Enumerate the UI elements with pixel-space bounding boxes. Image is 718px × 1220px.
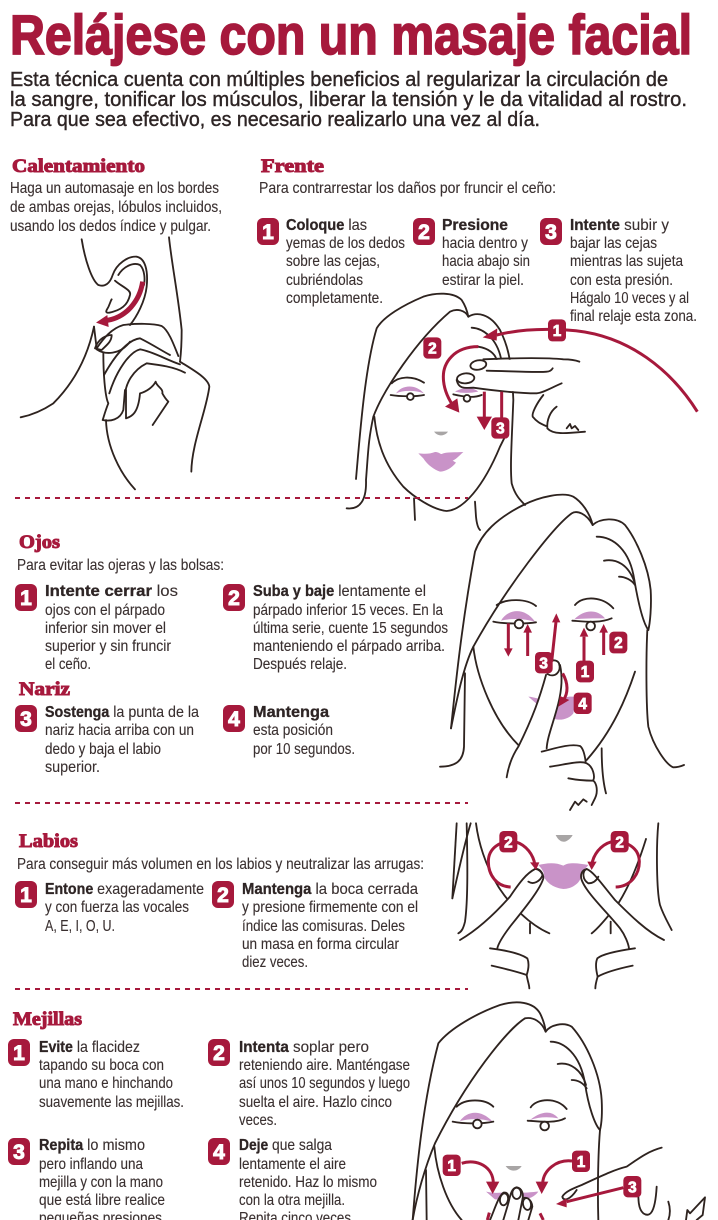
step 3 frente: 3 xyxy=(545,221,557,244)
number badges xyxy=(443,1151,641,1197)
lips xyxy=(418,452,463,472)
step 1 frente: completamente. xyxy=(286,290,383,307)
nose xyxy=(506,1166,522,1171)
arrow 2: 2 xyxy=(428,341,437,358)
step 1 frente: Coloque las xyxy=(286,217,367,234)
step 2 mejillas: veces. xyxy=(239,1112,277,1129)
circular arrows xyxy=(488,841,639,887)
step 1 frente: cubriéndolas xyxy=(286,272,363,289)
panel: ojos y nariz xyxy=(15,495,684,810)
right hand xyxy=(581,869,664,988)
arrow 1 xyxy=(483,319,697,412)
illustration: lips and fingers xyxy=(452,823,672,988)
step 1 labios: Entone exageradamente xyxy=(45,881,204,898)
step 3 nariz: superior. xyxy=(45,759,100,776)
step 2 mejillas: 2 xyxy=(213,1042,225,1065)
right hand pressing cheek xyxy=(562,1148,705,1220)
intro paragraph: Para que sea efectivo, es necesario realizarlo una vez al día. xyxy=(10,108,540,131)
hand xyxy=(542,745,597,810)
eye shadow xyxy=(501,611,605,622)
step 4 nariz xyxy=(223,704,355,758)
arrow 3 xyxy=(477,392,509,439)
text: calentamiento: usando los dedos índice y pulgar. xyxy=(10,218,211,235)
step 1 frente: 1 xyxy=(262,221,274,244)
step 2 frente: 2 xyxy=(418,221,430,244)
eye shadow xyxy=(396,386,478,393)
step 3 frente xyxy=(540,217,697,325)
step 3 frente: mientras las sujeta xyxy=(570,253,683,270)
step 2 mejillas xyxy=(208,1039,410,1129)
step 3 mejillas: mejilla y con la mano xyxy=(39,1174,163,1191)
step 1 mejillas: una mano e hinchando xyxy=(39,1075,173,1092)
number badges: 2 xyxy=(504,834,513,851)
panel: labios xyxy=(15,823,672,988)
step 3 nariz xyxy=(15,704,199,776)
step 1 ojos: 1 xyxy=(20,587,32,610)
number badges: 4 xyxy=(578,696,587,713)
left hand xyxy=(460,869,543,988)
step 1 ojos: el ceño. xyxy=(45,656,91,673)
step 2 labios: índice las comisuras. Deles xyxy=(242,918,405,935)
step 1 mejillas: 1 xyxy=(13,1042,25,1065)
step 3 frente: con esta presión. xyxy=(570,272,673,289)
number badges: 1 xyxy=(447,1158,456,1175)
step 1 frente xyxy=(257,217,405,307)
step 1 labios: y con fuerza las vocales xyxy=(45,899,189,916)
step 2 mejillas: reteniendo aire. Manténgase xyxy=(239,1057,410,1074)
step 2 ojos: manteniendo el párpado arriba. xyxy=(253,638,445,655)
step 4 nariz: por 10 segundos. xyxy=(253,741,355,758)
number badges: 1 xyxy=(581,664,590,681)
text: ojos intro: Para evitar las ojeras y las bolsas: xyxy=(17,557,224,574)
panel: frente xyxy=(257,157,697,530)
lips xyxy=(486,1192,538,1199)
number badges xyxy=(535,632,627,714)
number badges: 3 xyxy=(539,655,548,672)
heading: calentamiento: Calentamiento xyxy=(12,157,145,177)
nose xyxy=(556,835,573,842)
heading: ojos: Ojos xyxy=(19,533,60,553)
step 3 frente: final relaje esta zona. xyxy=(570,308,697,325)
step 1 mejillas xyxy=(8,1039,184,1111)
step 2 ojos: Suba y baje lentamente el xyxy=(253,583,426,600)
step 4 mejillas: con la otra mejilla. xyxy=(239,1192,345,1209)
step 1 frente: yemas de los dedos xyxy=(286,235,405,252)
step 3 frente: bajar las cejas xyxy=(570,235,657,252)
arrow 2 xyxy=(423,337,478,413)
step 3 nariz: Sostenga la punta de la xyxy=(45,704,199,721)
step 3 nariz: nariz hacia arriba con un xyxy=(45,722,194,739)
step 3 mejillas: pero inflando una xyxy=(39,1156,143,1173)
step 1 labios xyxy=(15,881,204,935)
text: calentamiento: de ambas orejas, lóbulos incluidos, xyxy=(10,199,222,216)
step 1 ojos: Intente cerrar los xyxy=(45,583,178,600)
step 1 ojos: inferior sin mover el xyxy=(45,620,166,637)
panel: mejillas xyxy=(8,1002,705,1220)
arrows xyxy=(504,613,608,707)
step 4 mejillas: lentamente el aire xyxy=(239,1156,346,1173)
hand over mouth xyxy=(490,1187,532,1220)
step 3 mejillas: Repita lo mismo xyxy=(39,1137,145,1154)
number badges: 3 xyxy=(628,1179,637,1196)
illustration: face with cheek exercise xyxy=(413,1002,705,1220)
arrow 3: 3 xyxy=(496,421,505,438)
step 3 nariz: 3 xyxy=(20,708,32,731)
step 2 ojos: párpado inferior 15 veces. En la xyxy=(253,602,443,619)
step 3 mejillas: que está libre realice xyxy=(39,1192,165,1209)
step 2 mejillas: Intenta soplar pero xyxy=(239,1039,369,1056)
step 2 labios: un masa en forma circular xyxy=(242,936,400,953)
step 2 ojos: 2 xyxy=(228,587,240,610)
step 3 nariz: dedo y baja el labio xyxy=(45,741,161,758)
step 4 nariz: 4 xyxy=(228,708,240,731)
number badges xyxy=(499,831,629,852)
step 1 labios: 1 xyxy=(20,884,32,907)
heading: frente: Frente xyxy=(261,157,324,177)
step 4 nariz: Mantenga xyxy=(253,704,329,721)
heading: mejillas: Mejillas xyxy=(13,1010,82,1030)
intro paragraph: Esta técnica cuenta con múltiples beneficios al regularizar la circulación de xyxy=(10,68,668,91)
step 2 labios: 2 xyxy=(217,884,229,907)
number badges: 2 xyxy=(614,635,623,652)
heading: nariz: Nariz xyxy=(19,680,70,700)
step 1 ojos: superior y sin fruncir xyxy=(45,638,172,655)
step 2 ojos: última serie, cuente 15 segundos xyxy=(253,620,448,637)
illustration: face with forehead massage xyxy=(347,294,697,530)
arrow 1: 1 xyxy=(553,323,562,340)
step 2 ojos: Después relaje. xyxy=(253,656,347,673)
step 4 mejillas: Deje que salga xyxy=(239,1137,332,1154)
step 1 frente: sobre las cejas, xyxy=(286,253,380,270)
number badges: 1 xyxy=(577,1154,586,1171)
illustration: face with eye and nose exercise xyxy=(440,495,684,810)
step 2 ojos xyxy=(223,583,448,673)
step 2 frente: estirar la piel. xyxy=(442,272,524,289)
illustration: ear and hand xyxy=(21,237,209,489)
step 2 labios: y presione firmemente con el xyxy=(242,899,418,916)
step 3 frente: Hágalo 10 veces y al xyxy=(570,290,689,307)
intro paragraph: la sangre, tonificar los músculos, liberar la tensión y le da vitalidad al rostro. xyxy=(10,88,687,111)
step 1 mejillas: Evite la flacidez xyxy=(39,1039,140,1056)
step 2 mejillas: así unos 10 segundos y luego xyxy=(239,1075,410,1092)
text: labios intro: Para conseguir más volumen en los labios y neutralizar las arrugas: xyxy=(17,856,424,873)
finger xyxy=(507,660,562,777)
intro paragraph xyxy=(10,68,687,131)
heading: labios: Labios xyxy=(19,832,78,852)
text: frente intro: Para contrarrestar los daños por fruncir el ceño: xyxy=(259,180,556,197)
step 2 frente xyxy=(413,217,530,289)
step 3 mejillas: 3 xyxy=(13,1141,25,1164)
fingers xyxy=(457,358,585,433)
step 2 labios: Mantenga la boca cerrada xyxy=(242,881,418,898)
step 2 frente: hacia dentro y xyxy=(442,235,528,252)
lips xyxy=(528,697,577,720)
step 2 labios: diez veces. xyxy=(242,954,308,971)
text: calentamiento: Haga un automasaje en los bordes xyxy=(10,180,219,197)
step 1 ojos: ojos con el párpado xyxy=(45,602,165,619)
step 2 frente: Presione xyxy=(442,217,508,234)
step 2 mejillas: suelta el aire. Hazlo cinco xyxy=(239,1094,392,1111)
step 2 labios xyxy=(212,881,418,971)
step 3 mejillas xyxy=(8,1137,165,1220)
eye shadow xyxy=(460,1113,558,1122)
step 4 mejillas xyxy=(208,1137,377,1220)
panel: calentamiento xyxy=(10,157,222,489)
step 1 mejillas: suavemente las mejillas. xyxy=(39,1094,184,1111)
step 4 nariz: esta posición xyxy=(253,722,333,739)
step 3 frente: Intente subir y xyxy=(570,217,669,234)
text: calentamiento xyxy=(10,180,222,235)
arrows xyxy=(462,1161,623,1220)
step 1 mejillas: tapando su boca con xyxy=(39,1057,164,1074)
arrow: around ear xyxy=(96,282,143,327)
nose xyxy=(434,432,448,435)
lips xyxy=(538,863,588,889)
step 1 labios: A, E, I, O, U. xyxy=(45,918,115,935)
step 2 frente: hacia abajo sin xyxy=(442,253,530,270)
step 4 mejillas: retenido. Haz lo mismo xyxy=(239,1174,377,1191)
number badges: 2 xyxy=(615,834,624,851)
step 1 ojos xyxy=(15,583,178,673)
step 4 mejillas: 4 xyxy=(213,1141,225,1164)
